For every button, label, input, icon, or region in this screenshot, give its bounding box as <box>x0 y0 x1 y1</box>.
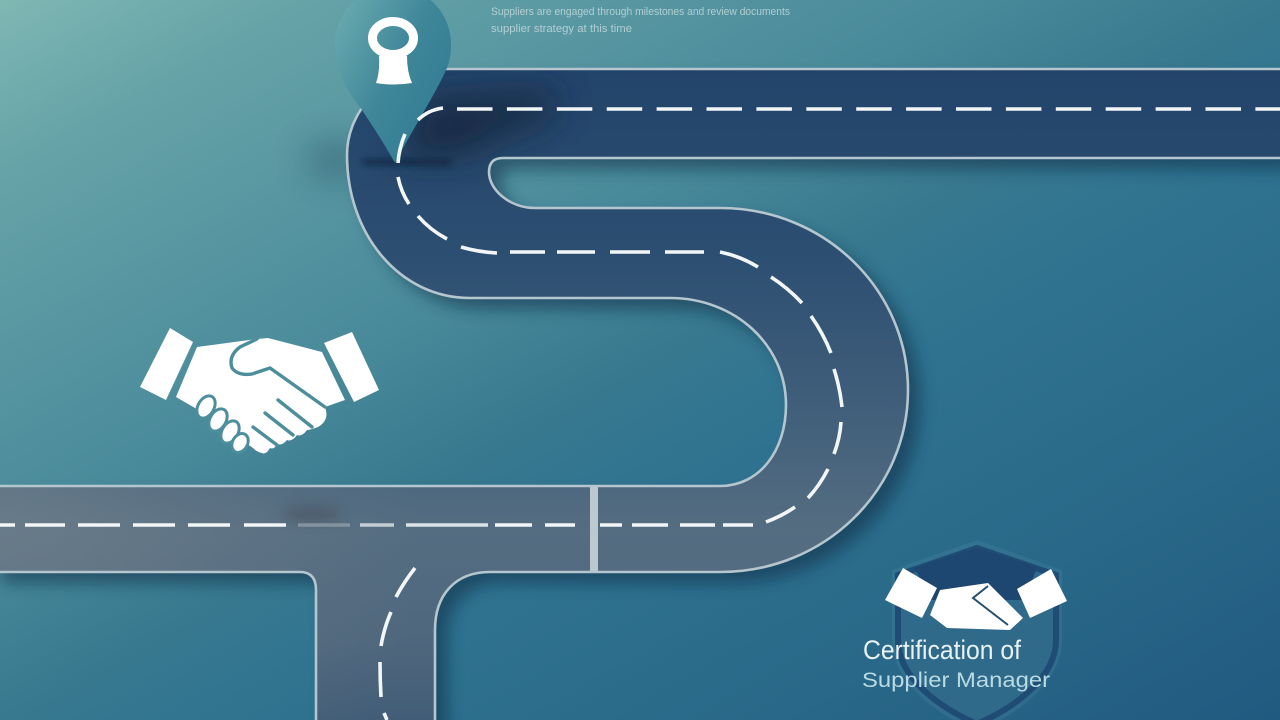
branch road dashes <box>380 568 415 720</box>
icon: large handshake <box>140 328 379 455</box>
badge: shield with handshake and certification text <box>862 540 1067 720</box>
location pin <box>335 0 451 163</box>
left cuff <box>140 328 193 400</box>
shadows on road <box>282 92 558 522</box>
pin icon: ring and base <box>372 22 414 84</box>
icon: small handshake <box>885 568 1067 630</box>
shield outer glow <box>892 540 1062 720</box>
badge: shield with handshake and certification text: Supplier Manager <box>862 669 1050 692</box>
junction line <box>590 487 598 571</box>
top caption text: Suppliers are engaged through milestones and review documents <box>491 6 790 18</box>
shield dark top <box>915 548 1037 600</box>
right cuff <box>324 332 379 402</box>
lighter left side of lower road <box>0 487 264 571</box>
top caption text: supplier strategy at this time <box>491 23 632 35</box>
shield body <box>898 548 1056 720</box>
road centre dashes <box>0 108 1280 525</box>
knuckles <box>193 393 251 455</box>
pin soft shadow on background <box>307 144 363 176</box>
pin base shadow <box>362 159 452 165</box>
top caption text <box>491 6 790 35</box>
clasped hands <box>176 338 345 453</box>
hand separation lines <box>231 339 325 445</box>
certification text: Certification of <box>863 635 1021 665</box>
